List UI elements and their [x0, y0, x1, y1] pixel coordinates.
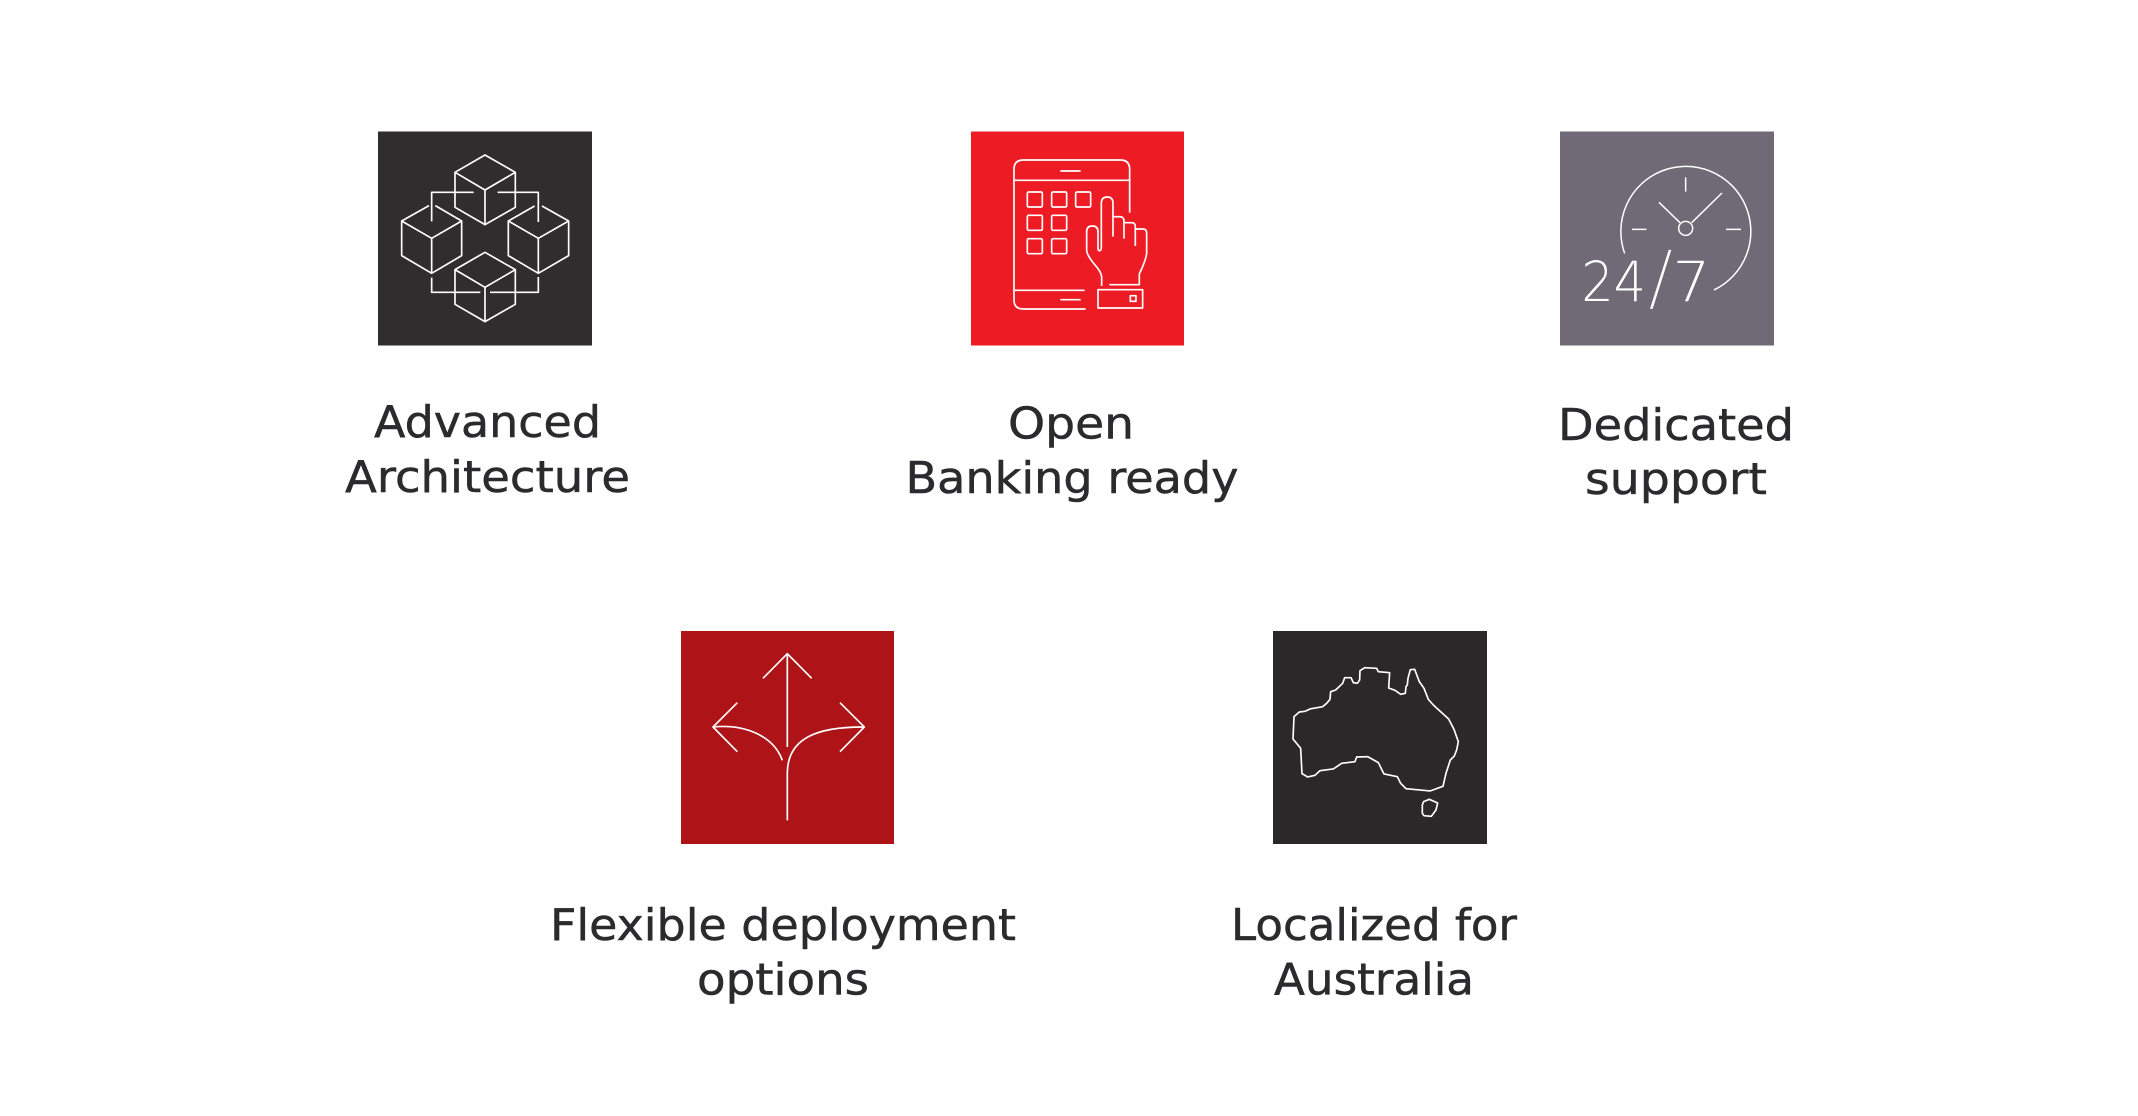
- label: Dedicated support: Dedicated: [1558, 400, 1794, 451]
- label: Localized for Australia: [1231, 900, 1518, 1006]
- panel: Flexible deployment options: [550, 631, 1016, 1006]
- label: Localized for Australia: Localized for: [1231, 900, 1518, 951]
- icon: three-way arrows: [713, 654, 864, 820]
- label: Localized for Australia: Australia: [1274, 954, 1474, 1006]
- icon: connected cubes: [402, 155, 569, 322]
- label: Flexible deployment options: options: [697, 954, 869, 1006]
- label: Dedicated support: support: [1585, 454, 1767, 505]
- label: Flexible deployment options: Flexible deployment: [550, 900, 1016, 951]
- label: Open Banking ready: Banking ready: [906, 453, 1238, 504]
- icon: 24/7 clock: 7: [1673, 251, 1710, 315]
- icon: 24/7 clock: 24: [1581, 251, 1646, 315]
- panel: Dedicated support: [1558, 132, 1794, 505]
- icon tile: dark red square: [681, 631, 894, 844]
- panel: Advanced Architecture: [345, 132, 630, 503]
- icon: map of Australia: [1293, 668, 1458, 816]
- label: Advanced Architecture: Architecture: [345, 452, 630, 503]
- icon: 24/7 clock: /: [1648, 236, 1673, 321]
- icon tile: dark square: [378, 132, 592, 346]
- panel: Localized for Australia: [1231, 631, 1518, 1006]
- label: Dedicated support: [1558, 400, 1794, 505]
- icon: 24/7 clock: [1581, 166, 1751, 321]
- label: Open Banking ready: [906, 398, 1238, 504]
- label: Advanced Architecture: [345, 397, 630, 503]
- label: Flexible deployment options: [550, 900, 1016, 1006]
- label: Open Banking ready: Open: [1008, 398, 1134, 450]
- icon tile: grey square: [1560, 132, 1774, 346]
- label: Advanced Architecture: Advanced: [374, 397, 601, 448]
- icon: tablet with pointing hand: [1014, 160, 1147, 309]
- icon tile: bright red square: [971, 132, 1184, 346]
- panel: Open Banking ready: [906, 132, 1238, 504]
- icon tile: charcoal square: [1273, 631, 1487, 844]
